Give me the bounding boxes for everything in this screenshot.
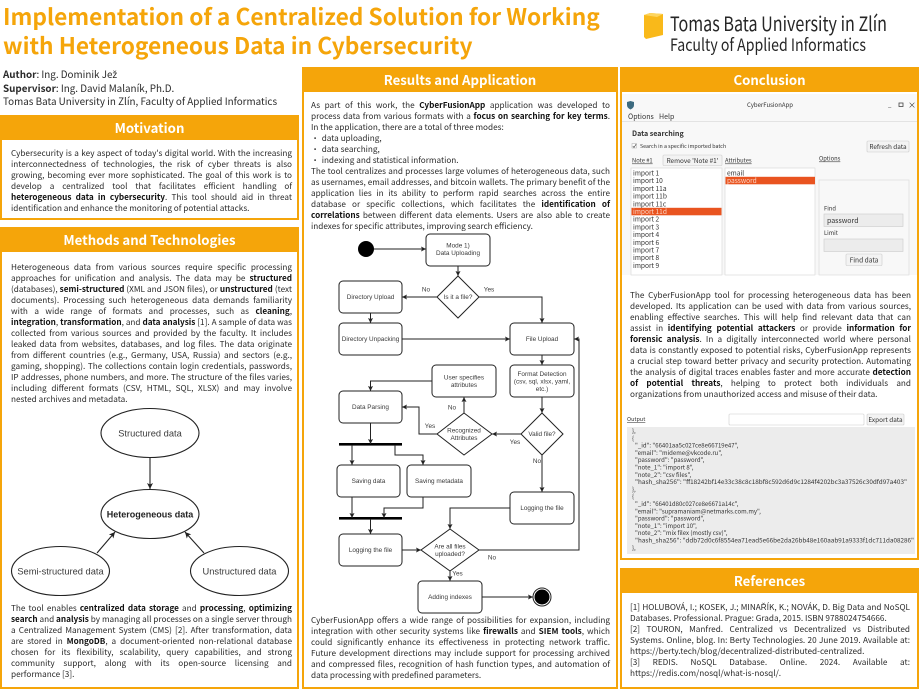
text: methods storage (11, 602, 292, 680)
screenshot: output pane: "hash_sha256": "ddb72d0c6f8554ea71ead5e66be2da26bb48e160aab91a9333f1dc711da08286" (635, 536, 914, 544)
screenshot: application window: email (727, 168, 744, 178)
screenshot: output pane: "note_1": "import 8", (635, 462, 694, 472)
screenshot: application window: × (908, 100, 916, 111)
screenshot: application window: import 9 (633, 260, 660, 270)
text: methods intro: Heterogeneous data from various sources require specific processing (11, 260, 292, 272)
screenshot: output pane: "password": "password", (635, 455, 705, 464)
screenshot: output pane: }, (632, 543, 636, 552)
text: conclusion: developed. Its application can be used with data from various sources, (630, 300, 911, 312)
flowchart: data uploading: Recognized (447, 428, 481, 434)
heading: conclusion: Conclusion (733, 70, 806, 89)
text: conclusion: of potential threats, helping to protect both individuals and (630, 376, 911, 388)
screenshot: application window: Search in a specific imported batch (640, 142, 726, 150)
screenshot: application window: Note #1 (632, 156, 653, 164)
screenshot: application window: import 8 (633, 252, 660, 262)
flowchart: data uploading: Directory Upload (347, 294, 395, 301)
screenshot: application window (622, 100, 917, 276)
text: references list (630, 600, 910, 678)
screenshot: application window: import 11b (633, 191, 667, 201)
flowchart: data uploading: Are all files (434, 544, 466, 550)
text: methods intro: IP addresses, phone numbers, and more. The structure of the files varies, (11, 370, 292, 382)
text: results outlook: Future development directions may include support for processing archived (311, 646, 610, 658)
text: results intro: database or specific collections, which facilitates the identification of (311, 198, 610, 210)
diagram: heterogeneous data: Unstructured data (203, 566, 277, 576)
text: methods intro: with a wide range of formats and processes, such as cleaning, (11, 304, 292, 316)
flowchart: data uploading: No (488, 554, 497, 562)
flowchart: data uploading: Format Detection (517, 371, 567, 378)
text: references list: Systems. Online, blog. In: Berty Technologies. 20 June 2019. Available at: (630, 634, 910, 646)
screenshot: application window: import 7 (633, 244, 660, 254)
text: methods intro: documents). Processing such heterogeneous data demands familiarity (11, 294, 292, 306)
text: methods storage: The tool enables centralized data storage and processing, optimizing (11, 602, 292, 614)
screenshot: application window: password (827, 216, 859, 226)
text: results outlook: could significantly enhance its effectiveness in protecting network traffic. (311, 636, 610, 648)
text: references list: [3] REDIS. NoSQL Database. Online. 2024. Available at: (630, 656, 910, 668)
heading: results: Results and Application (384, 70, 536, 89)
text: references list: Databases. Professional. Prague: Grada, 2015. ISBN 9788024754666. (630, 612, 887, 624)
heading: motivation: Motivation (115, 118, 184, 137)
screenshot: application window: Find data (850, 254, 879, 264)
flowchart: data uploading (336, 234, 580, 614)
flowchart: data uploading: Yes (425, 423, 435, 430)
text: motivation: Cybersecurity is a key aspect of today's digital world. With the increasing (11, 147, 292, 159)
text: methods intro: gaming, shopping). The collections contain login credentials, passwords, (11, 360, 292, 372)
heading: motivation (0, 115, 299, 140)
screenshot: output pane: "hash_sha256": "ff18242bf14e33c38c8c18bf8c592d6d9c1284f4202bc3a37526c30dfd97a403" (635, 477, 907, 486)
screenshot: application window: Refresh data (869, 142, 907, 151)
text: methods intro: integration, transformation, and data analysis [1]. A sample of data was (11, 316, 292, 328)
text: references list: [1] HOLUBOVÁ, I.; KOSEK, J.; MINAŘÍK, K.; NOVÁK, D. Big Data and NoSQL (630, 600, 910, 612)
screenshot: output pane: "password": "password", (635, 514, 705, 523)
screenshot: application window: Data searching (632, 129, 684, 139)
text: methods intro: collected from various sources and provided by the faculty. It includes (11, 326, 292, 338)
text: methods intro: leaked data from websites, databases, and log files. The data originate (11, 338, 292, 350)
screenshot: output pane: "note_2": "csv files", (635, 470, 692, 479)
text: results intro: • (311, 142, 319, 154)
text: methods storage: performance [3]. (11, 668, 74, 680)
panel: methods and technologies (0, 227, 299, 689)
flowchart: data uploading: etc.) (536, 386, 548, 393)
heading: references: References (734, 571, 805, 590)
text: motivation: growing, becoming ever more sophisticated. The goal of this work is to (11, 169, 292, 181)
diagram: heterogeneous data (10, 408, 290, 596)
flowchart: data uploading: Logging the file (349, 547, 393, 554)
text: conclusion: forensic analysis. In a digitally interconnected world where personal (630, 332, 911, 344)
text: methods storage: community support, along with its open-source licensing and (11, 656, 292, 668)
text: methods intro: including different formats (CSV, HTML, SQL, XLSX) and may involve (11, 382, 292, 394)
panel: conclusion (620, 67, 919, 560)
title (3, 0, 600, 61)
text: motivation: heterogeneous data in cybersecurity. This tool should aid in threat (11, 191, 292, 203)
text: results intro: correlations between different data elements. Users are also able to create (311, 208, 610, 220)
text: conclusion: assist in identifying potential attackers or provide information for (630, 322, 911, 334)
text: references list: https://berty.tech/blog/decentralized-distributed-centralized. (630, 644, 864, 656)
text: results outlook (311, 614, 610, 680)
text: results outlook: CyberFusionApp offers a wide range of possibilities for expansion, including (311, 614, 610, 626)
flowchart: data uploading: Yes (452, 570, 463, 578)
screenshot: application window: import 10 (633, 175, 663, 185)
screenshot: application window: CyberFusionApp (747, 100, 793, 109)
panel: results and application (302, 67, 618, 689)
flowchart: data uploading: No (533, 458, 542, 465)
text: results intro: indexes for specific attributes, improving search efficiency. (311, 220, 533, 232)
flowchart: data uploading: Valid file? (528, 431, 556, 438)
flowchart: data uploading: Mode 1) (446, 242, 470, 250)
flowchart: data uploading: uploaded? (435, 551, 465, 558)
heading: methods: Methods and Technologies (63, 230, 236, 249)
text: results intro: application lies in its ability to perform rapid searches across the entire (311, 186, 610, 198)
screenshot: output pane: { (632, 433, 634, 442)
flowchart: data uploading: Yes (510, 439, 520, 446)
heading: results (302, 67, 618, 92)
screenshot: application window: import 3 (633, 221, 660, 231)
diagram: heterogeneous data: Semi-structured data (17, 566, 104, 576)
text: methods intro: from different countries (e.g., Germany, USA, Russia) and sectors (e.g., (11, 348, 292, 360)
screenshot: application window: import 11a (633, 183, 667, 193)
text: results outlook: and compressed files, recognition of hash function types, and automation of (311, 658, 610, 670)
text: references list: [2] TOURON, Manfred. Centralized vs Decentralized vs Distributed (630, 622, 910, 634)
flowchart: data uploading: Data Parsing (352, 404, 389, 411)
screenshot: application window: Attributes (725, 156, 752, 164)
screenshot: output pane: "_id": "66401aa5c027ce8e66719e47", (635, 441, 739, 450)
flowchart: data uploading: Attributes (450, 435, 478, 442)
screenshot: application window: Remove 'Note #1' (667, 156, 719, 165)
screenshot: application window: import 1 (633, 168, 660, 178)
screenshot: application window: Options (819, 154, 841, 162)
diagram: heterogeneous data: Heterogeneous data (107, 510, 194, 520)
flowchart: data uploading: File Upload (526, 336, 559, 343)
text: motivation (11, 147, 292, 214)
text: conclusion: enabling effective searches. This will help find relevant data that can (630, 310, 911, 322)
screenshot: application window: Options (628, 112, 654, 122)
text: results intro (311, 98, 610, 232)
text: methods storage: a Centralized Management System (CMS) [2]. After transformation, data (11, 624, 292, 636)
screenshot: output pane: "email": "mideme@vkcode.ru", (635, 448, 722, 457)
screenshot: application window: import 11d (633, 206, 667, 216)
text: results outlook: integration with other security systems like firewalls and SIEM tools, which (311, 624, 610, 636)
text: results intro: As part of this work, the CyberFusionApp application was developed to (311, 98, 610, 110)
author block: Tomas Bata University in Zlín, Faculty of Applied Informatics (3, 94, 277, 108)
heading: references (620, 568, 919, 593)
screenshot: output pane: "note_2": "mix filex (mostly csv)", (635, 528, 728, 537)
text: methods storage: are stored in MongoDB, a document-oriented non-relational database (11, 634, 292, 646)
screenshot: output pane: "note_1": "import 10", (635, 521, 697, 530)
text: results intro: • (311, 154, 319, 166)
text: methods intro (11, 260, 292, 404)
flowchart: data uploading: No (422, 286, 431, 293)
screenshot: output pane: "email": "supramaniam@netmarks.com.my", (635, 506, 761, 515)
flowchart: data uploading: Saving metadata (415, 478, 463, 485)
text: conclusion: data is constantly exposed to potential risks, CyberFusionApp represents (630, 344, 911, 356)
flowchart: data uploading: attributes (451, 382, 477, 389)
university logo (644, 8, 887, 56)
text: references list: https://redis.com/nosql/what-is-nosql/. (630, 666, 781, 678)
flowchart: data uploading: Adding indexes (428, 594, 472, 601)
text: methods intro: nested archives and metadata. (11, 392, 128, 404)
flowchart: data uploading: Yes (484, 286, 494, 293)
flowchart: data uploading: Is it a file? (444, 294, 473, 301)
text: results intro: process data from various formats with a focus on searching for key terms. (311, 110, 610, 122)
screenshot: output pane: Output (627, 415, 645, 423)
flowchart: data uploading: User specifies (444, 374, 484, 382)
text: results intro: In the application, there are a total of three modes: (311, 120, 504, 132)
text: results intro: data searching, (322, 142, 380, 154)
heading: methods (0, 227, 299, 252)
text: conclusion: the analysis of digital traces enables faster and more accurate detection (630, 366, 911, 378)
screenshot: output pane: { (632, 492, 634, 501)
text: motivation: develop a centralized tool that facilitates efficient handling of (11, 180, 292, 192)
screenshot: output pane (627, 414, 915, 554)
screenshot: application window: import 2 (633, 214, 660, 224)
text: methods intro: (databases), semi-structured (XML and JSON files), or unstructured (text (11, 282, 292, 294)
screenshot: output pane: "_id": "66401d80c027ce8e6671a14c", (635, 499, 739, 508)
author block: Author: Ing. Dominik Jež (3, 67, 117, 81)
screenshot: application window: password (727, 175, 757, 185)
flowchart: data uploading: No (448, 404, 457, 412)
text: methods storage: search and analysis by managing all processes on a single server through (11, 612, 292, 624)
text: conclusion: organizations from unauthorized access and misuse of their data. (630, 388, 877, 400)
screenshot: application window: import 11c (633, 198, 667, 208)
flowchart: data uploading: Data Uploading (436, 250, 480, 257)
panel: references (620, 568, 919, 689)
flowchart: data uploading: (csv, sql, xlsx, yaml, (514, 378, 570, 385)
heading: conclusion (620, 67, 919, 92)
text: methods storage: chosen for its flexibility, scalability, query capabilities, and strong (11, 646, 292, 658)
text: results intro: as usernames, email addresses, and bitcoin wallets. The primary benefit of the (311, 176, 610, 188)
screenshot: application window: Find (824, 204, 836, 212)
text: conclusion (630, 288, 911, 400)
screenshot: application window: import 4 (633, 229, 660, 239)
text: results intro: indexing and statistical information. (322, 154, 459, 166)
author block (3, 67, 277, 108)
screenshot: application window: import 6 (633, 237, 660, 247)
screenshot: application window: _ (888, 100, 892, 109)
flowchart: data uploading: Directory Unpacking (342, 336, 400, 343)
text: methods intro: approaches for unification and analysis. The data may be structured (11, 272, 292, 284)
text: results intro: data uploading, (322, 132, 382, 144)
screenshot: application window: Help (659, 112, 674, 122)
screenshot: output pane: Export data (868, 415, 903, 424)
diagram: heterogeneous data: Structured data (118, 428, 183, 438)
screenshot: application window: Limit (824, 228, 839, 237)
text: results intro: The tool centralizes and processes large volumes of heterogeneous data, such (311, 164, 610, 176)
text: motivation: interconnectedness of technologies, the risk of cyber threats is also (11, 158, 292, 170)
panel: motivation (0, 115, 299, 220)
text: motivation: identification and enhance the monitoring of potential attacks. (11, 202, 249, 214)
text: results intro: • (311, 132, 319, 144)
flowchart: data uploading: Saving data (352, 478, 386, 485)
text: conclusion: a crucial step toward better privacy and security protection. Automating (630, 354, 911, 366)
text: conclusion: The CyberFusionApp tool for processing heterogeneous data has been (630, 288, 911, 300)
flowchart: data uploading: Logging the file (520, 505, 564, 512)
screenshot: output pane: }, (632, 426, 636, 435)
title: with Heterogeneous Data in Cybersecurity (3, 28, 472, 61)
text: results outlook: data processing with predefined parameters. (311, 668, 481, 680)
screenshot: output pane: }, (632, 484, 636, 493)
author block: Supervisor: Ing. David Malaník, Ph.D. (3, 81, 174, 95)
